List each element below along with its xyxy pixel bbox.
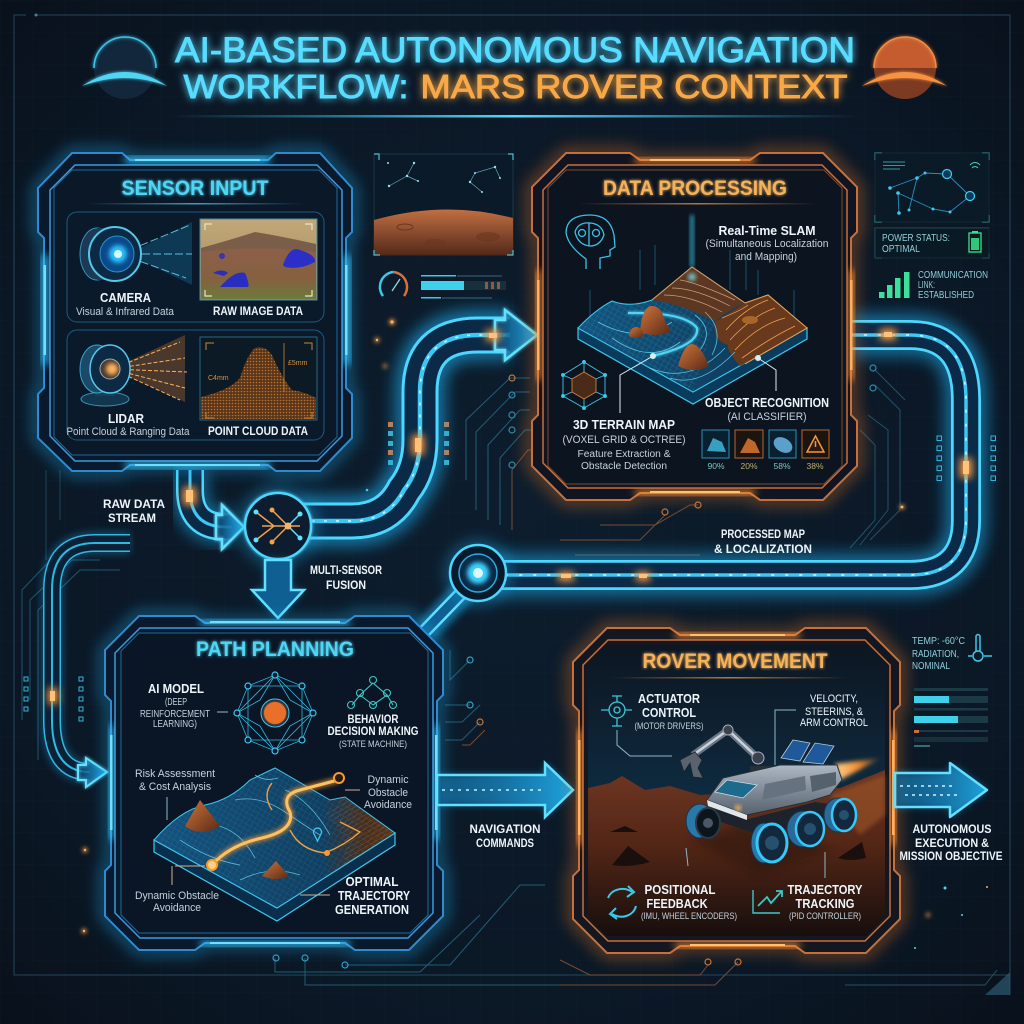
optimal trajectory text — [335, 874, 410, 917]
planning hills — [185, 800, 220, 832]
behavior text: (STATE MACHINE) — [339, 739, 407, 750]
classifier thumbnails: 20% — [740, 461, 758, 471]
mars viewport panel — [374, 154, 513, 255]
arrowhead to fusion — [216, 505, 244, 549]
SLAM text — [706, 223, 828, 263]
terrain hills — [640, 306, 670, 335]
raw image thumbnail — [200, 219, 317, 300]
environment status: NOMINAL — [912, 661, 950, 672]
mars surface — [374, 209, 513, 255]
label: multi-sensor fusion: FUSION — [326, 580, 366, 592]
trajectory tracking text — [788, 882, 863, 922]
title — [170, 31, 860, 118]
star map — [890, 173, 970, 213]
panel: path planning — [105, 616, 443, 950]
label: raw data stream: STREAM — [108, 511, 156, 525]
behavior text: DECISION MAKING — [328, 726, 419, 738]
status panel: star map and power: OPTIMAL — [882, 244, 920, 255]
far wheels — [787, 798, 856, 847]
robot arm — [693, 730, 758, 758]
velocity text: ARM CONTROL — [800, 717, 868, 729]
title line 2 orange: MARS ROVER CONTEXT — [420, 68, 848, 105]
point cloud thumbnail: £5mm — [288, 360, 308, 367]
telemetry bars — [914, 688, 988, 747]
optimal trajectory — [212, 780, 338, 865]
label: mission objective: EXECUTION & — [915, 836, 989, 850]
signal bars — [879, 272, 910, 298]
icon: actuator — [601, 696, 632, 726]
glowing particles — [82, 319, 988, 949]
rover scene — [588, 645, 885, 936]
arrowhead to data processing — [495, 310, 537, 360]
rover illustration — [680, 725, 882, 863]
velocity text — [800, 693, 868, 729]
object recognition text — [705, 396, 829, 423]
dynamic avoidance left text: Avoidance — [153, 902, 201, 914]
pipe: fusion to data processing — [300, 310, 537, 521]
terrain map text — [562, 417, 686, 472]
risk text: & Cost Analysis — [139, 781, 211, 793]
icon: brain head — [566, 215, 615, 269]
constellations — [389, 163, 500, 192]
label: navigation commands: NAVIGATION — [470, 822, 540, 836]
actuator text: CONTROL — [642, 705, 696, 720]
positional feedback text — [641, 882, 737, 922]
icon: camera — [80, 222, 192, 285]
title divider — [170, 115, 860, 118]
icon: feedback loop — [608, 886, 636, 919]
label: processed map — [714, 527, 812, 556]
lidar labels: LIDAR — [108, 411, 145, 426]
orange ridge — [715, 295, 807, 366]
positional feedback text: FEEDBACK — [646, 896, 708, 911]
arrow: fusion to path planning — [252, 560, 304, 618]
planning terrain map — [154, 768, 395, 921]
pipe: feedback loop to path planning — [52, 543, 130, 787]
rover heading: ROVER MOVEMENT — [642, 650, 828, 673]
risk text: Risk Assessment — [135, 768, 215, 780]
positional feedback text: POSITIONAL — [644, 882, 716, 897]
environment status: RADIATION, — [912, 649, 959, 660]
multi-sensor fusion node — [238, 486, 318, 566]
status panel: star map and power: POWER STATUS: — [882, 233, 950, 244]
camera row: RAW IMAGE DATA — [213, 306, 303, 318]
solar panels — [781, 740, 810, 761]
camera row — [67, 212, 324, 322]
object recognition text: (AI CLASSIFIER) — [728, 411, 806, 423]
point cloud thumbnail: C4mm — [208, 375, 229, 382]
gauge and status bars — [380, 272, 506, 298]
AI model text: (DEEP — [165, 697, 187, 708]
positional feedback text: (IMU, WHEEL ENCODERS) — [641, 911, 737, 922]
classifier thumbnails — [702, 430, 829, 471]
camera row: Visual & Infrared Data — [76, 306, 175, 318]
icon: thermometer — [968, 634, 992, 661]
dynamic avoidance right text — [364, 774, 412, 811]
risk text — [135, 768, 215, 793]
icon: lidar — [80, 335, 187, 406]
panel: data processing — [532, 153, 857, 500]
SLAM text: Real-Time SLAM — [718, 223, 816, 238]
label: mission objective: AUTONOMOUS — [912, 822, 992, 836]
icon: blue planet — [82, 37, 167, 99]
actuator text: (MOTOR DRIVERS) — [634, 721, 704, 731]
pipe: data processing to junction node — [490, 335, 966, 575]
power box — [875, 228, 989, 258]
classifier thumbnails: 38% — [806, 461, 824, 471]
velocity text: STEERINS, & — [805, 706, 864, 718]
mini status squares — [24, 422, 996, 721]
SLAM text: (Simultaneous Localization — [706, 238, 828, 250]
label: mission objective: MISSION OBJECTIVE — [900, 849, 1002, 863]
suspension and wheel shadows — [710, 802, 835, 835]
AI model text: AI MODEL — [148, 681, 204, 696]
communication link: COMMUNICATION — [918, 270, 988, 281]
label: processed map: PROCESSED MAP — [721, 527, 805, 541]
label: processed map: & LOCALIZATION — [714, 542, 812, 556]
icon: trajectory chart — [753, 890, 782, 913]
actuator text: ACTUATOR — [638, 691, 701, 706]
terrain map text: (VOXEL GRID & OCTREE) — [562, 434, 686, 446]
data heading: DATA PROCESSING — [603, 177, 787, 200]
label: mission objective — [900, 822, 1002, 863]
dynamic avoidance right text: Avoidance — [364, 799, 412, 811]
terrain callout lines — [620, 356, 776, 413]
icon: battery — [969, 233, 981, 252]
optimal trajectory text: GENERATION — [335, 902, 409, 917]
terrain map text: 3D TERRAIN MAP — [573, 417, 675, 432]
AI model text — [140, 681, 210, 730]
terrain map text: Feature Extraction & — [578, 449, 671, 460]
terrain map text: Obstacle Detection — [581, 461, 667, 472]
point cloud thumbnail — [200, 337, 317, 420]
label: multi-sensor fusion: MULTI-SENSOR — [310, 565, 383, 577]
label: multi-sensor fusion — [310, 565, 383, 592]
pipe: raw data stream — [190, 470, 244, 549]
data pulses in pipes — [48, 329, 972, 704]
label: raw data stream: RAW DATA — [103, 497, 165, 511]
arrow: navigation commands — [437, 763, 573, 817]
environment status: TEMP: -60°C — [912, 636, 965, 647]
title line 2 cyan: WORKFLOW: — [184, 68, 408, 105]
AI model text: LEARNING) — [153, 719, 197, 730]
behavior text — [328, 714, 419, 750]
3D terrain map — [578, 215, 807, 413]
classifier thumbnails: 90% — [707, 461, 725, 471]
lidar row: Point Cloud & Ranging Data — [66, 426, 190, 438]
sensor frame glow — [38, 153, 352, 471]
panel: sensor input — [38, 153, 352, 471]
trajectory tracking text: TRAJECTORY — [788, 882, 863, 897]
dynamic avoidance right text: Dynamic — [368, 774, 409, 786]
environment status — [912, 634, 992, 672]
label: navigation commands: COMMANDS — [476, 836, 534, 850]
communication link: ESTABLISHED — [918, 290, 974, 301]
planning frame glow — [105, 616, 443, 950]
classifier thumbnails: 58% — [773, 461, 791, 471]
title line 1: AI-BASED AUTONOMOUS NAVIGATION — [175, 31, 855, 70]
thruster flame — [835, 758, 882, 780]
cyan contours — [598, 312, 735, 380]
status panel: star map and power — [875, 153, 989, 258]
circuit nodes — [273, 365, 876, 968]
data frame glow — [532, 153, 857, 500]
near wheels — [686, 804, 787, 863]
dynamic avoidance right text: Obstacle — [368, 787, 408, 799]
rover frame glow — [573, 628, 900, 953]
junction node to path planning — [420, 541, 510, 636]
icon: voxel cube — [562, 360, 606, 410]
SLAM text: and Mapping) — [735, 251, 797, 263]
optimal trajectory text: OPTIMAL — [346, 874, 399, 889]
AI model text: REINFORCEMENT — [140, 709, 210, 720]
trajectory tracking text: TRACKING — [796, 896, 854, 911]
velocity text: VELOCITY, — [810, 693, 858, 705]
dynamic avoidance left text — [135, 890, 219, 914]
circuit traces — [22, 370, 997, 985]
object recognition text: OBJECT RECOGNITION — [705, 396, 829, 410]
rover body — [750, 766, 770, 776]
icon: neural network — [234, 672, 316, 770]
sensor heading: SENSOR INPUT — [122, 177, 269, 200]
lidar row: POINT CLOUD DATA — [208, 426, 308, 438]
icon: behavior tree — [348, 676, 396, 708]
brown peak — [652, 267, 745, 322]
terrain surface — [578, 267, 807, 392]
planning heading: PATH PLANNING — [196, 638, 354, 661]
label: navigation commands — [470, 822, 540, 850]
actuator text — [634, 691, 704, 731]
arrowhead to path planning — [78, 758, 107, 787]
optimal trajectory text: TRAJECTORY — [338, 888, 410, 903]
arrow: mission objective — [895, 763, 987, 817]
dynamic avoidance left text: Dynamic Obstacle — [135, 890, 219, 902]
camera labels: CAMERA — [100, 290, 152, 305]
communication link: LINK: — [918, 280, 935, 291]
trajectory tracking text: (PID CONTROLLER) — [789, 911, 861, 922]
lidar row — [66, 330, 324, 440]
behavior text: BEHAVIOR — [348, 714, 399, 726]
icon: mars planet — [862, 37, 947, 99]
label: raw data stream — [103, 497, 165, 525]
panel: rover movement — [573, 628, 900, 953]
communication link — [879, 270, 988, 301]
